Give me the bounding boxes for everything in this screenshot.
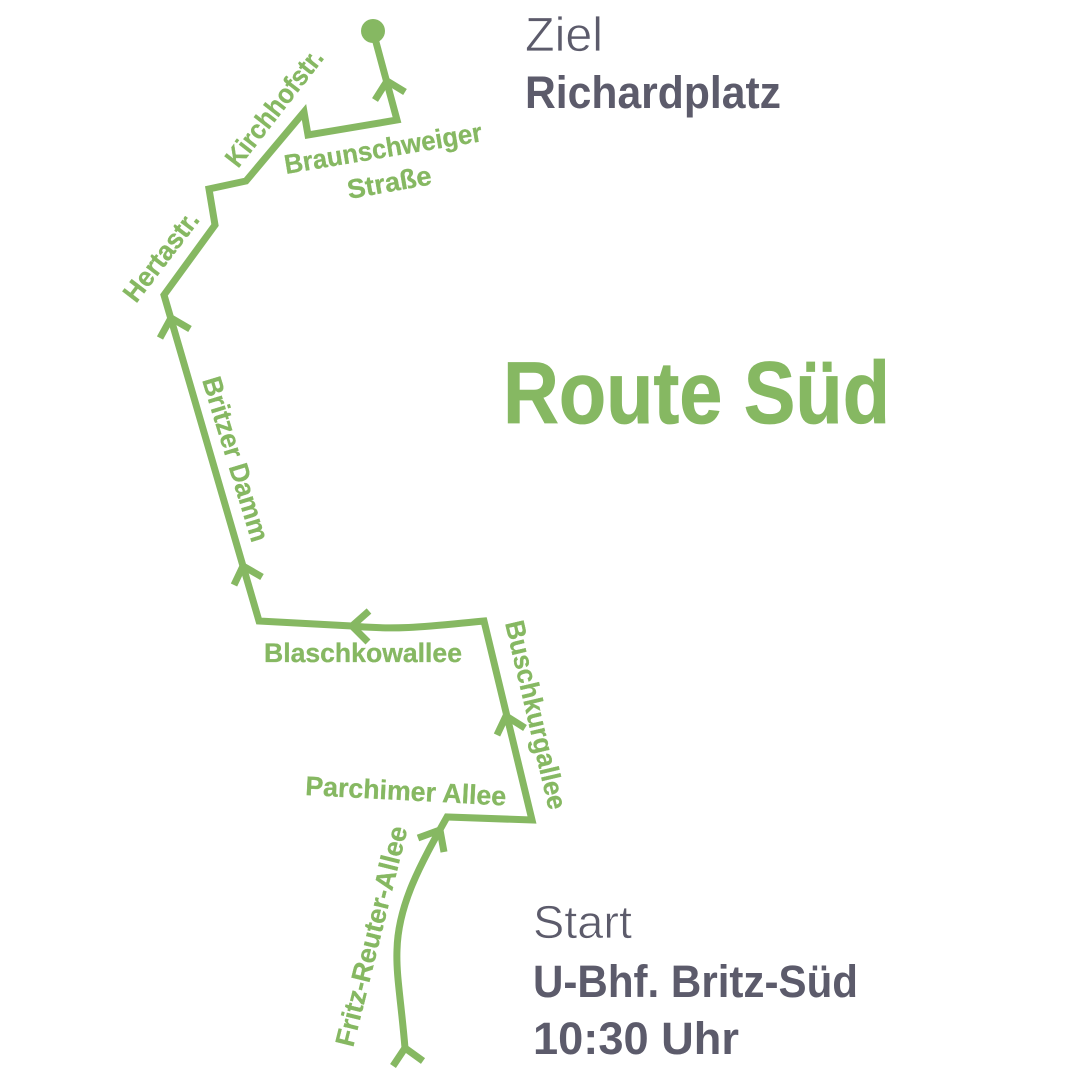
street: Blaschkowallee: Blaschkowallee bbox=[264, 638, 462, 668]
street: Braunschweiger: Braunschweiger bbox=[282, 117, 485, 180]
title: Route Süd: Route Süd bbox=[503, 343, 890, 442]
street: Fritz-Reuter-Allee: Fritz-Reuter-Allee bbox=[330, 823, 413, 1049]
street: Hertastr.: Hertastr. bbox=[117, 205, 205, 308]
heading: U-Bhf. Britz-Süd: U-Bhf. Britz-Süd bbox=[533, 956, 858, 1007]
street: Straße: Straße bbox=[345, 161, 434, 205]
heading: Richardplatz: Richardplatz bbox=[525, 67, 781, 118]
direction arrows bbox=[160, 81, 525, 1066]
heading: Start: Start bbox=[533, 896, 632, 948]
heading: 10:30 Uhr: 10:30 Uhr bbox=[533, 1013, 739, 1064]
street: Buschkurgallee: Buschkurgallee bbox=[499, 618, 572, 812]
street: Kirchhofstr.: Kirchhofstr. bbox=[219, 43, 330, 173]
street: Britzer Damm: Britzer Damm bbox=[196, 373, 275, 545]
route line bbox=[164, 31, 532, 1048]
heading: Ziel: Ziel bbox=[525, 9, 603, 62]
destination dot bbox=[361, 19, 385, 43]
street labels bbox=[117, 43, 572, 1049]
street: Parchimer Allee: Parchimer Allee bbox=[305, 771, 507, 812]
